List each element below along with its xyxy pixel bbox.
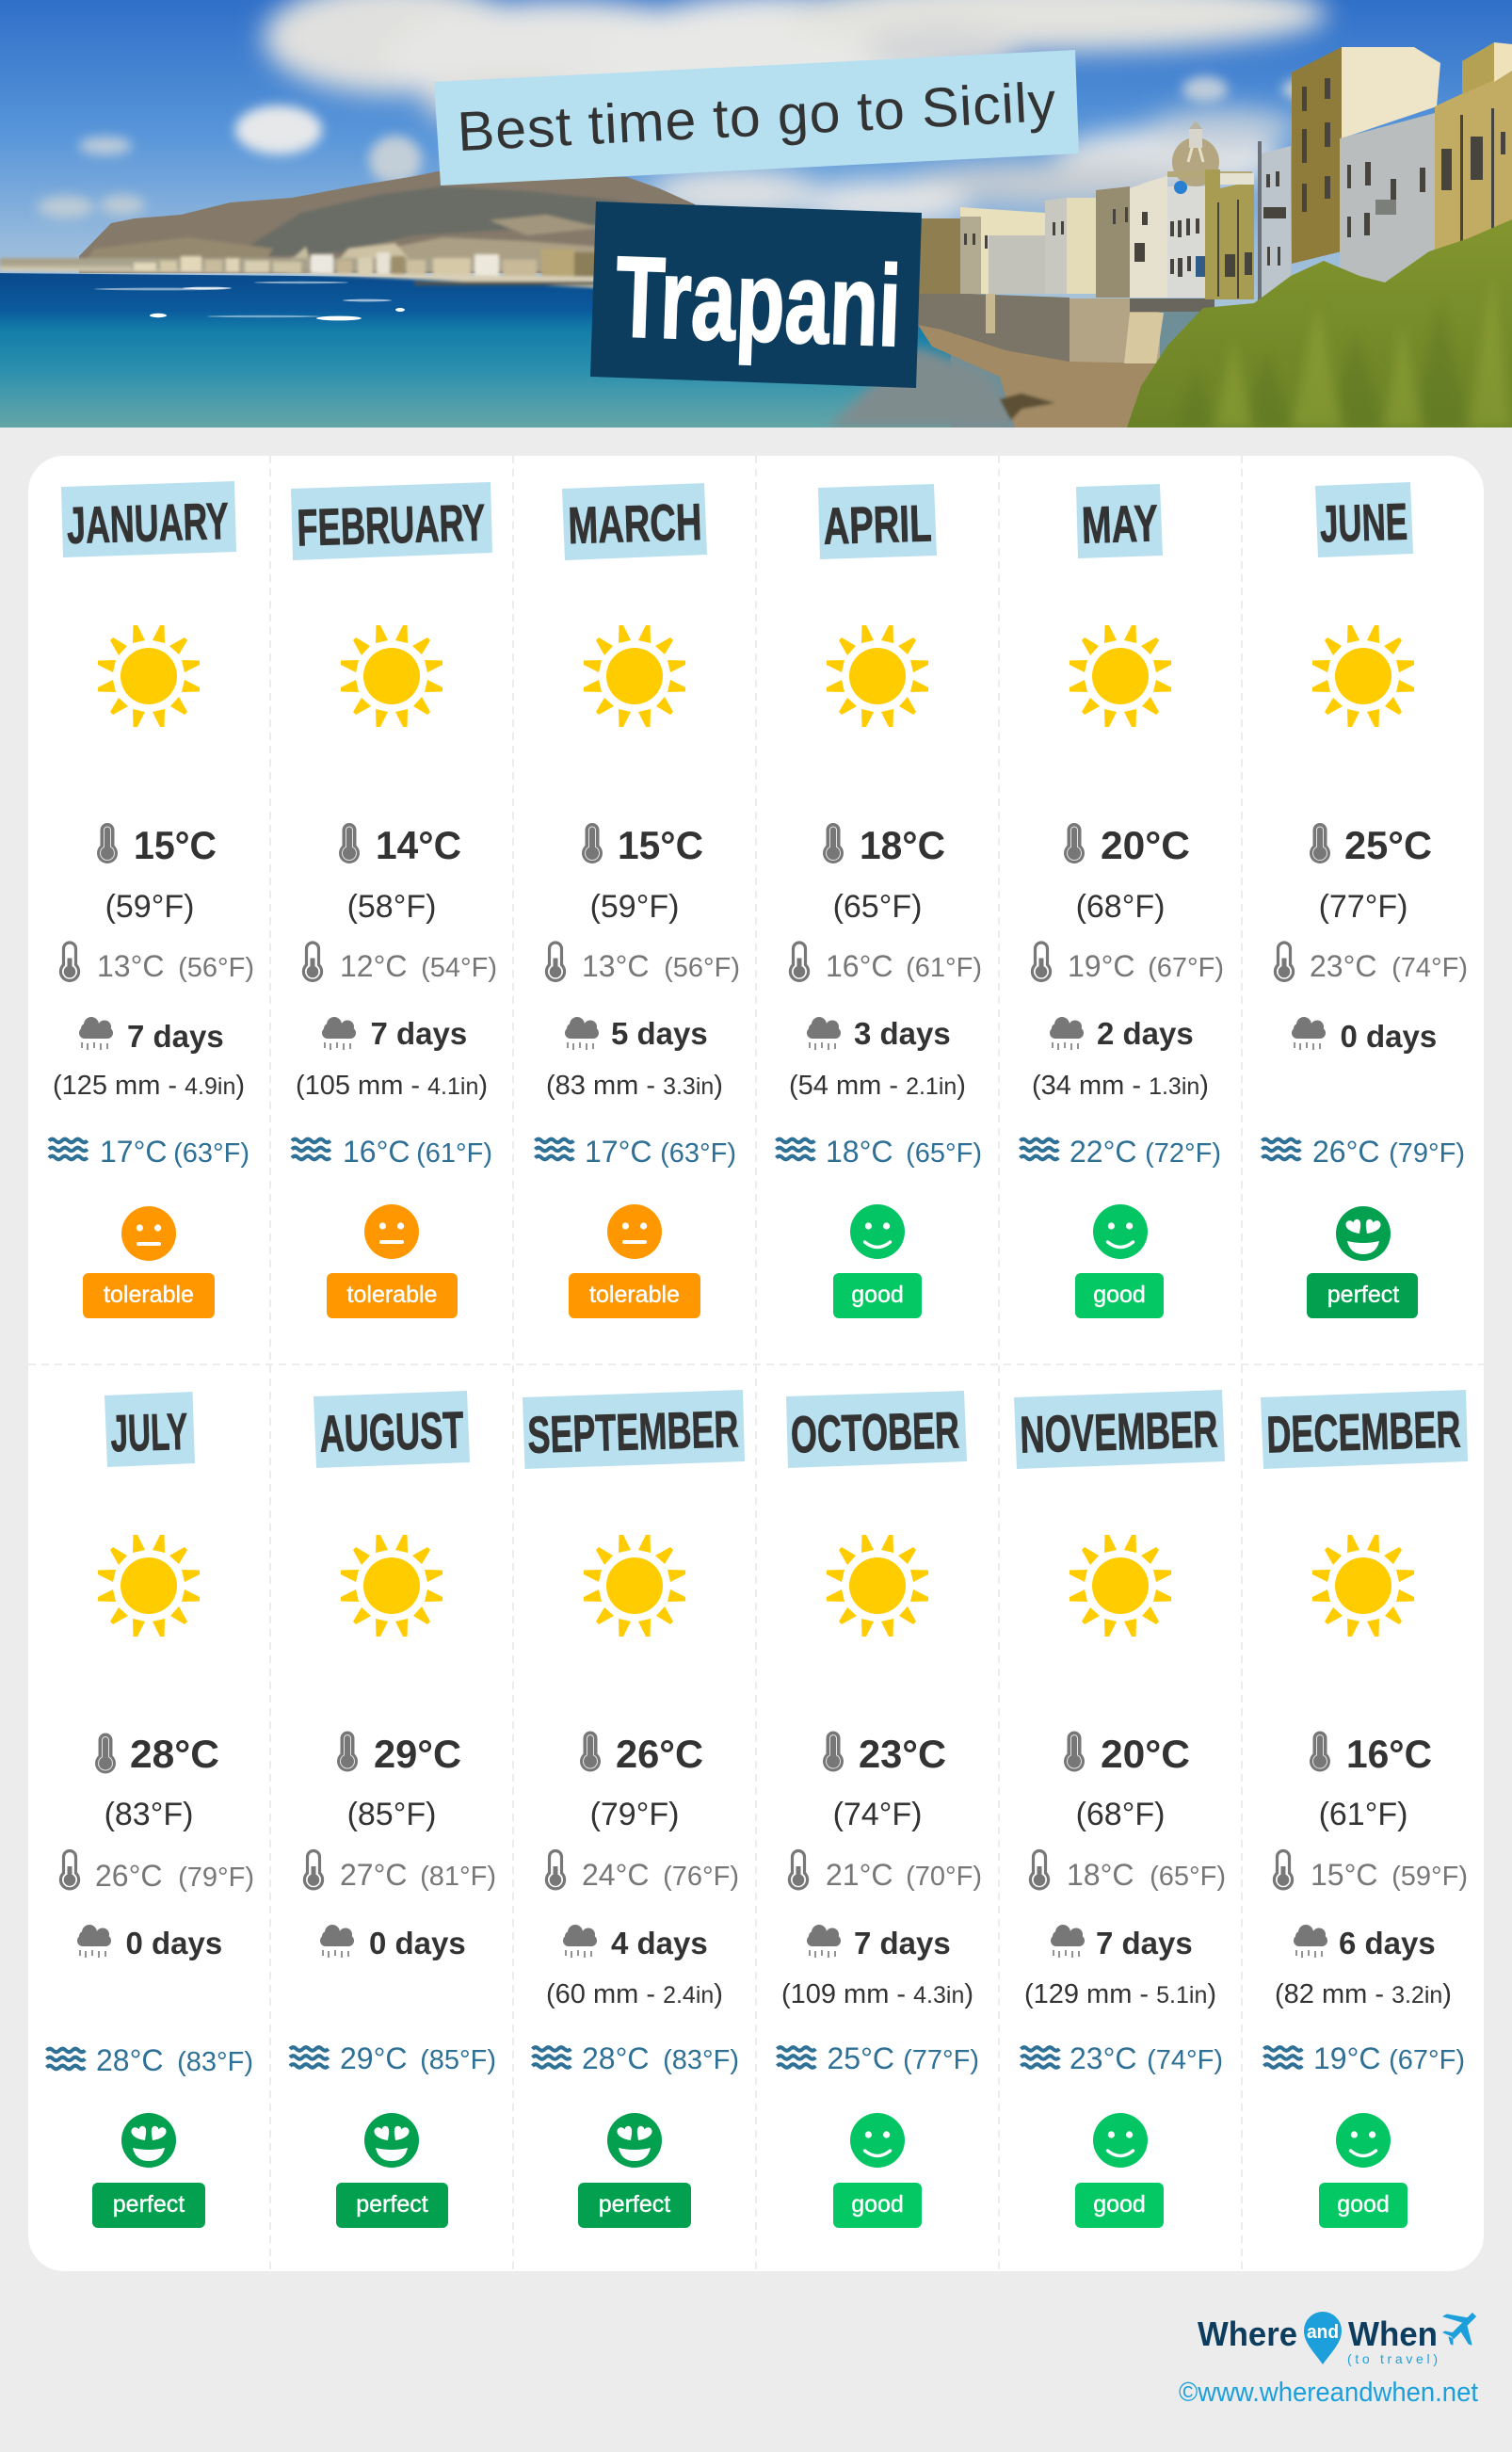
sea temperature: (79°F) xyxy=(1389,1138,1465,1169)
month label: March xyxy=(562,483,707,560)
rainfall: 4 days xyxy=(611,1926,708,1960)
rating: good: good xyxy=(1093,1282,1146,1308)
icon: sun xyxy=(1312,1535,1414,1637)
low temperature xyxy=(546,943,740,983)
sea temperature: (83°F) xyxy=(663,2045,739,2075)
rainfall xyxy=(1292,1017,1437,1054)
rainfall: 7 days xyxy=(854,1926,951,1960)
sea temperature: 28°C xyxy=(96,2043,164,2077)
city name banner: Trapani xyxy=(614,233,903,370)
low temperature: 13°C xyxy=(582,949,650,983)
low temperature: (54°F) xyxy=(421,953,497,983)
bush xyxy=(1127,219,1512,427)
rainfall: 0 days xyxy=(126,1926,222,1960)
icon: sun xyxy=(341,625,442,727)
high temperature: (59°F) xyxy=(105,889,194,925)
high temperature: (59°F) xyxy=(590,889,679,925)
low temperature: (56°F) xyxy=(178,953,254,983)
rating: good: good xyxy=(851,2191,904,2218)
low temperature xyxy=(304,1851,496,1892)
month label: October xyxy=(786,1391,967,1468)
rainfall xyxy=(781,1925,973,2009)
rainfall xyxy=(789,1016,966,1101)
rainfall: (105 mm - 4.1in) xyxy=(296,1071,488,1101)
sea temperature xyxy=(1021,2041,1223,2075)
rating: perfect xyxy=(336,2113,448,2228)
high temperature: (58°F) xyxy=(347,889,436,925)
month label: May: MAY xyxy=(1081,493,1159,555)
sea temperature: 23°C xyxy=(1070,2041,1137,2075)
low temperature: (61°F) xyxy=(906,953,982,983)
high temperature: 15°C xyxy=(618,823,703,867)
rating: tolerable xyxy=(569,1204,700,1318)
rainfall xyxy=(296,1016,488,1101)
month label: September: SEPTEMBER xyxy=(527,1399,739,1464)
rainfall: (82 mm - 3.2in) xyxy=(1275,1979,1452,2009)
rainfall: 5 days xyxy=(611,1016,708,1051)
city name banner xyxy=(590,202,922,388)
high temperature xyxy=(1310,823,1432,925)
rating: good: good xyxy=(1337,2191,1390,2218)
panel: April xyxy=(776,484,982,1318)
high temperature: (65°F) xyxy=(833,889,922,925)
title banner: Best time to go to Sicily xyxy=(456,71,1057,163)
high temperature xyxy=(823,823,945,925)
high temperature xyxy=(580,1731,703,1832)
rainfall: 0 days xyxy=(1341,1019,1437,1054)
month label: June xyxy=(1315,482,1413,557)
sea temperature xyxy=(776,1135,982,1169)
low temperature: (76°F) xyxy=(663,1862,739,1892)
rating: good xyxy=(1319,2113,1407,2228)
logo: Where and When: and xyxy=(1307,2322,1339,2343)
sea temperature: (72°F) xyxy=(1145,1138,1221,1169)
rainfall: 7 days xyxy=(371,1016,467,1051)
high temperature: 20°C xyxy=(1101,1732,1190,1776)
high temperature: (61°F) xyxy=(1319,1797,1407,1832)
low temperature: (56°F) xyxy=(664,953,740,983)
icon: sun xyxy=(98,1535,200,1637)
low temperature xyxy=(60,1851,254,1893)
icon: sun xyxy=(827,625,928,727)
rainfall: 2 days xyxy=(1097,1016,1194,1051)
high temperature: 18°C xyxy=(860,823,945,867)
sea temperature: 18°C xyxy=(826,1135,893,1169)
rating: good: good xyxy=(1093,2191,1146,2218)
month label: November: NOVEMBER xyxy=(1020,1399,1218,1464)
high temperature: (77°F) xyxy=(1319,889,1407,925)
windows xyxy=(964,78,1505,298)
rocky ground xyxy=(918,325,1156,427)
rating: perfect xyxy=(578,2113,691,2228)
high temperature xyxy=(95,1732,219,1832)
sea temperature xyxy=(1263,2041,1465,2075)
panel: calendar card xyxy=(28,456,1484,2271)
sea temperature xyxy=(533,2041,739,2075)
panel: March xyxy=(535,483,740,1318)
month label: August xyxy=(314,1391,470,1468)
month label: May xyxy=(1076,484,1163,558)
sea temperature xyxy=(535,1135,736,1169)
month label: January: JANUARY xyxy=(66,492,230,555)
buildings xyxy=(918,42,1512,301)
dome xyxy=(1172,137,1219,186)
sea temperature: 17°C xyxy=(585,1135,651,1169)
low temperature: 16°C xyxy=(826,949,893,983)
rainfall xyxy=(1032,1016,1209,1101)
low temperature xyxy=(546,1851,739,1892)
low temperature: (67°F) xyxy=(1148,953,1224,983)
month label: February xyxy=(291,482,492,560)
low temperature xyxy=(60,943,254,983)
high temperature xyxy=(582,823,703,925)
high temperature xyxy=(1064,823,1190,925)
sea temperature: (67°F) xyxy=(1389,2045,1465,2075)
low temperature: 18°C xyxy=(1067,1858,1134,1892)
logo: Where and When xyxy=(1198,2312,1474,2366)
icon: sun xyxy=(1312,625,1414,727)
icon: sun xyxy=(584,625,685,727)
sea temperature: (77°F) xyxy=(903,2045,979,2075)
icon: sun xyxy=(584,1535,685,1637)
rainfall: 7 days xyxy=(1096,1926,1193,1960)
rainfall xyxy=(320,1925,466,1960)
high temperature: 20°C xyxy=(1101,823,1190,867)
high temperature xyxy=(1064,1731,1190,1832)
high temperature: 16°C xyxy=(1346,1732,1432,1776)
icon: sun xyxy=(827,1535,928,1637)
panel: August xyxy=(290,1391,496,2228)
low temperature: (79°F) xyxy=(178,1863,254,1893)
low temperature: 15°C xyxy=(1311,1858,1378,1892)
low temperature xyxy=(1275,943,1468,983)
rating: good xyxy=(1075,2113,1164,2228)
low temperature: (59°F) xyxy=(1391,1862,1468,1892)
icon: sun xyxy=(1070,625,1171,727)
rating: perfect: perfect xyxy=(1327,1282,1399,1308)
low temperature: 27°C xyxy=(340,1858,407,1892)
sea temperature: 16°C xyxy=(343,1135,410,1169)
sea temperature xyxy=(47,2043,253,2077)
surf xyxy=(94,282,405,320)
rating: good xyxy=(833,1204,922,1318)
source url: ©www.whereandwhen.net xyxy=(1179,2378,1478,2408)
sea temperature xyxy=(1262,1135,1465,1169)
panel: October xyxy=(778,1391,982,2228)
high temperature: (74°F) xyxy=(833,1797,922,1832)
seawall xyxy=(918,292,1214,363)
rainfall: (34 mm - 1.3in) xyxy=(1032,1071,1209,1101)
month label: February: FEBRUARY xyxy=(297,493,486,557)
header photo: Trapani coastline xyxy=(0,0,1512,427)
sea temperature xyxy=(1021,1135,1221,1169)
logo: Where and When: Where xyxy=(1198,2315,1297,2353)
high temperature: 29°C xyxy=(374,1732,461,1776)
rainfall: 3 days xyxy=(854,1016,951,1051)
low temperature: 19°C xyxy=(1068,949,1135,983)
title banner xyxy=(434,50,1079,186)
low temperature xyxy=(789,1851,982,1892)
month label: October: OCTOBER xyxy=(790,1400,960,1464)
low temperature: 12°C xyxy=(340,949,407,983)
rainfall: 6 days xyxy=(1339,1926,1436,1960)
high temperature: 14°C xyxy=(376,823,461,867)
rainfall: (60 mm - 2.4in) xyxy=(546,1979,723,2009)
rainfall xyxy=(53,1017,245,1101)
low temperature xyxy=(303,943,497,983)
high temperature: 25°C xyxy=(1344,823,1432,867)
low temperature: 26°C xyxy=(95,1859,162,1893)
rainfall xyxy=(1024,1925,1216,2009)
mountain xyxy=(79,171,716,273)
low temperature: 24°C xyxy=(582,1858,650,1892)
high temperature: 28°C xyxy=(130,1732,219,1776)
rainfall xyxy=(546,1016,723,1101)
panel: May xyxy=(1021,484,1224,1318)
icon: sun xyxy=(341,1535,442,1637)
sea temperature xyxy=(778,2041,979,2075)
low temperature: 23°C xyxy=(1310,949,1376,983)
sea temperature: 26°C xyxy=(1312,1135,1380,1169)
rainfall: 0 days xyxy=(369,1926,466,1960)
month label: November xyxy=(1014,1390,1225,1469)
rainfall xyxy=(1275,1925,1452,2009)
high temperature xyxy=(823,1731,946,1832)
low temperature: (70°F) xyxy=(906,1862,982,1892)
rating: tolerable xyxy=(83,1206,215,1318)
low temperature xyxy=(1032,943,1224,983)
sea temperature: (74°F) xyxy=(1147,2045,1223,2075)
sea temperature: 28°C xyxy=(582,2041,650,2075)
high temperature: (68°F) xyxy=(1076,889,1165,925)
sea temperature: (61°F) xyxy=(416,1138,492,1169)
logo: Where and When: When xyxy=(1348,2315,1438,2353)
rating: tolerable xyxy=(327,1204,458,1318)
rating: good: good xyxy=(851,1282,904,1308)
panel: February xyxy=(291,482,497,1318)
month label: April xyxy=(818,484,937,559)
high temperature: (85°F) xyxy=(347,1797,436,1832)
sea temperature: (63°F) xyxy=(173,1138,249,1169)
sea temperature: (65°F) xyxy=(906,1138,982,1169)
rainfall: (125 mm - 4.9in) xyxy=(53,1071,245,1101)
rating: tolerable: tolerable xyxy=(104,1282,194,1308)
icon: sun xyxy=(98,625,200,727)
panel: January xyxy=(49,481,254,1318)
rating: perfect: perfect xyxy=(113,2191,185,2218)
high temperature: 15°C xyxy=(134,823,217,867)
high temperature: (68°F) xyxy=(1076,1797,1165,1832)
rainfall: (109 mm - 4.3in) xyxy=(781,1979,973,2009)
month label: August: AUGUST xyxy=(319,1400,464,1463)
low temperature: (74°F) xyxy=(1391,953,1468,983)
low temperature: (81°F) xyxy=(420,1862,496,1892)
high temperature xyxy=(339,823,461,925)
sea temperature: (83°F) xyxy=(177,2047,253,2077)
low temperature xyxy=(1030,1851,1226,1892)
panel: June xyxy=(1262,482,1468,1318)
panel: July xyxy=(47,1392,254,2228)
rating: perfect: perfect xyxy=(599,2191,670,2218)
sea temperature: 25°C xyxy=(827,2041,894,2075)
icon: sun xyxy=(1070,1535,1171,1637)
high temperature: 23°C xyxy=(859,1732,946,1776)
sea temperature: 29°C xyxy=(340,2041,407,2075)
sea xyxy=(0,273,951,427)
panel: September xyxy=(523,1390,745,2228)
high temperature: (83°F) xyxy=(105,1797,193,1832)
sea temperature: 17°C xyxy=(100,1135,168,1169)
month label: April: APRIL xyxy=(823,493,932,556)
rainfall: (129 mm - 5.1in) xyxy=(1024,1979,1216,2009)
high temperature xyxy=(1310,1731,1432,1832)
month label: January xyxy=(61,481,236,557)
sea temperature: (85°F) xyxy=(420,2045,496,2075)
month label: June: JUNE xyxy=(1319,492,1408,553)
rainfall xyxy=(77,1925,222,1960)
rainfall: (83 mm - 3.3in) xyxy=(546,1071,723,1101)
rating: tolerable: tolerable xyxy=(347,1282,437,1308)
high temperature: (79°F) xyxy=(590,1797,679,1832)
low temperature xyxy=(790,943,982,983)
town along the shore xyxy=(0,249,604,288)
month label: July xyxy=(105,1392,195,1467)
low temperature: 13°C xyxy=(97,949,164,983)
month label: July: JULY xyxy=(110,1402,188,1462)
rating: tolerable: tolerable xyxy=(589,1282,680,1308)
low temperature: (65°F) xyxy=(1150,1862,1226,1892)
rainfall: (54 mm - 2.1in) xyxy=(789,1071,966,1101)
panel: November xyxy=(1014,1390,1226,2228)
low temperature xyxy=(1274,1851,1468,1892)
logo: Where and When: (to travel) xyxy=(1347,2351,1438,2366)
rainfall: 7 days xyxy=(127,1019,224,1054)
month label: September xyxy=(523,1390,745,1469)
panel: December xyxy=(1261,1390,1468,2228)
sea temperature: (63°F) xyxy=(660,1138,736,1169)
sea temperature: 19°C xyxy=(1313,2041,1380,2075)
sea temperature: 22°C xyxy=(1070,1135,1137,1169)
rating: perfect xyxy=(1307,1206,1418,1318)
rating: good xyxy=(1075,1204,1164,1318)
rating: perfect: perfect xyxy=(356,2191,428,2218)
rating: good xyxy=(833,2113,922,2228)
high temperature xyxy=(337,1731,461,1832)
sea temperature xyxy=(290,2041,496,2075)
low temperature: 21°C xyxy=(826,1858,893,1892)
sea temperature xyxy=(49,1135,249,1169)
high temperature xyxy=(97,823,217,925)
month label: March: MARCH xyxy=(568,492,702,555)
rating: perfect xyxy=(92,2113,205,2228)
rainfall xyxy=(546,1925,723,2009)
high temperature: 26°C xyxy=(616,1732,703,1776)
sea temperature xyxy=(292,1135,492,1169)
